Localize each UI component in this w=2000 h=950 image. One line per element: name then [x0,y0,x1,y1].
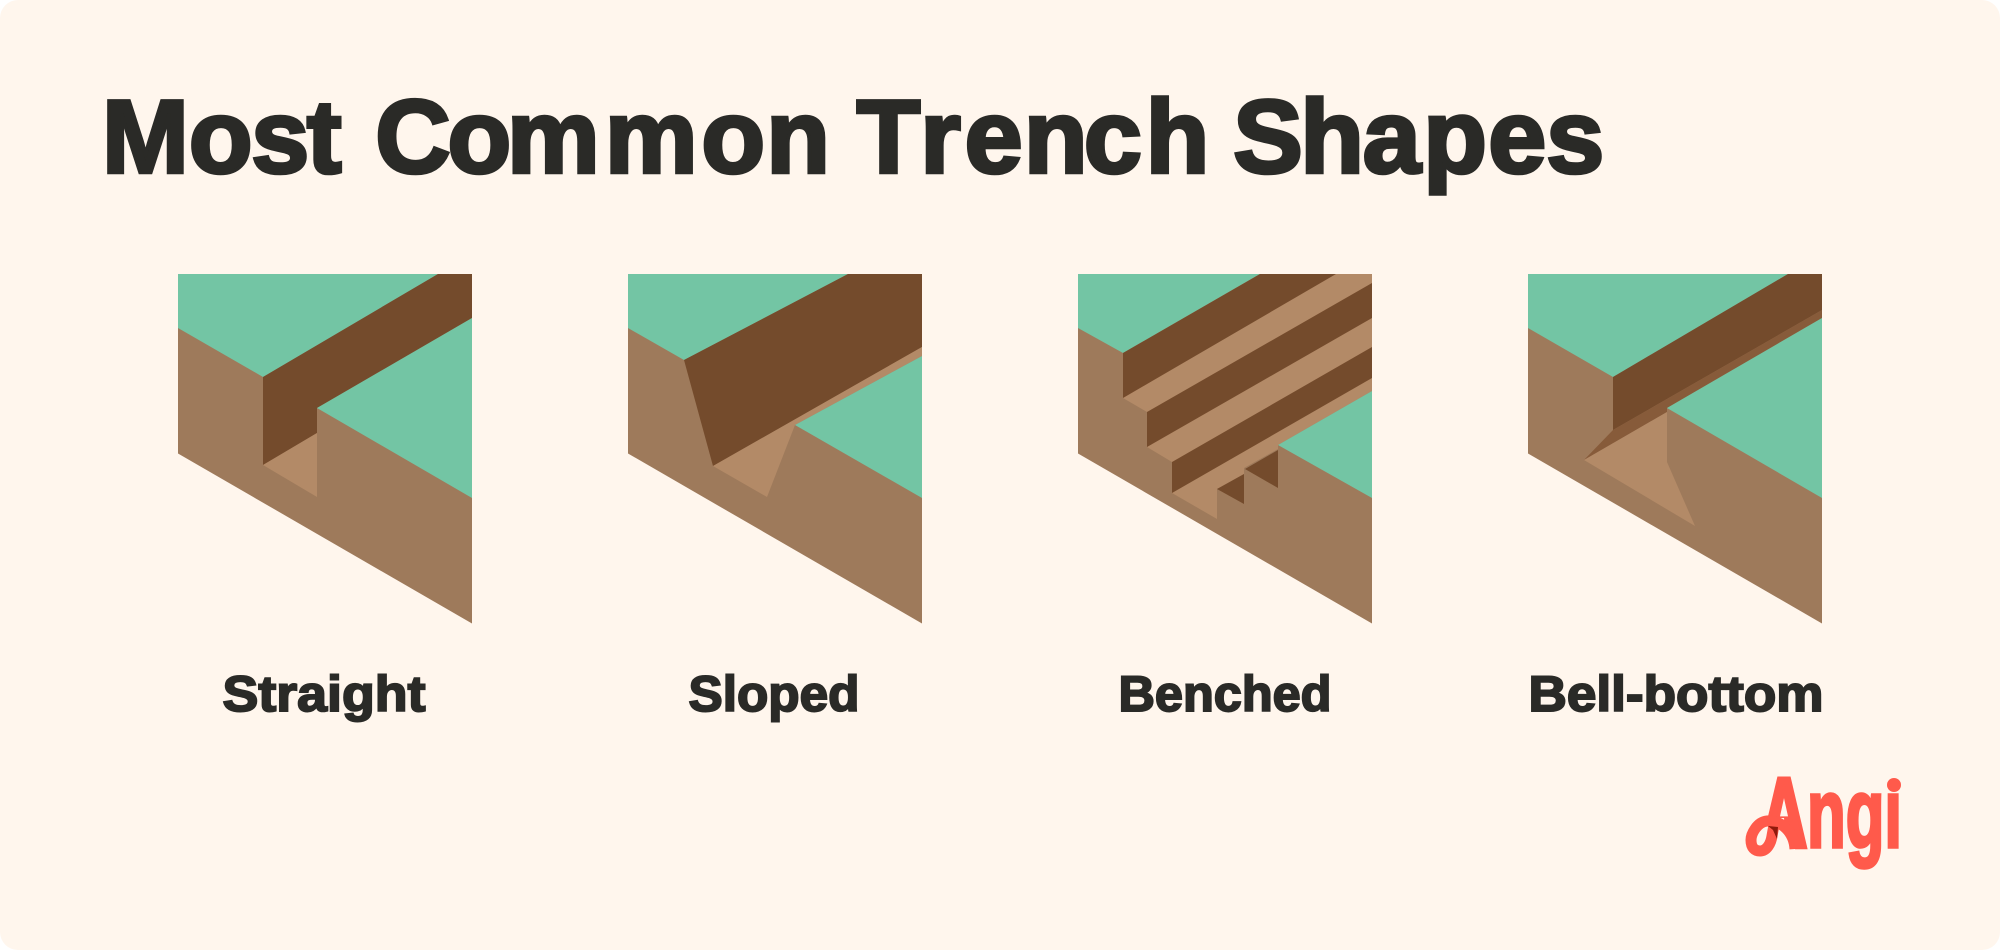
grass left [178,274,438,377]
panel: bell-bottom trench illustration [1528,274,1822,624]
far step wall upper [1245,450,1278,488]
soil block [1528,274,1822,624]
logo letter A: A [1761,758,1807,868]
undercut wall [1584,310,1822,460]
bench wall 1 [1123,274,1336,398]
sloped wall [684,274,922,466]
logo letters ngi: ngi [1807,758,1902,868]
trench floor and slope [713,347,922,497]
grass left [1078,274,1260,353]
soil block [178,274,472,624]
logo swoosh shadow [1768,826,1778,839]
label: Bell-bottom: Bell-bottom [1528,666,1824,722]
panel: straight trench illustration [178,274,472,624]
panel: sloped trench illustration [628,274,922,624]
panel: benched trench illustration [1078,274,1372,624]
trench wall [1613,274,1822,430]
soil block [1078,274,1372,624]
logo swoosh [1751,821,1795,851]
grass right [1667,318,1822,498]
label: Straight: Straight [222,666,426,722]
trench floor [263,433,317,497]
grass right [795,356,922,498]
soil block [628,274,922,624]
bench surfaces [1123,274,1372,519]
title: Most Common Trench Shapes [102,80,1604,196]
logo i-dot mask [1884,768,1906,789]
grass right [1278,391,1372,498]
far step wall lower [1217,474,1244,504]
logo: Angi [1746,776,1901,870]
bench wall 2 [1147,283,1372,447]
grass left [1528,274,1788,377]
grass left [628,274,848,360]
label: Sloped: Sloped [688,666,860,722]
logo i-dot [1887,778,1901,792]
bell floor [1584,412,1695,526]
grass right [317,318,472,498]
label: Benched: Benched [1118,666,1332,722]
trench wall [263,274,472,465]
bench wall 3 [1172,347,1372,493]
